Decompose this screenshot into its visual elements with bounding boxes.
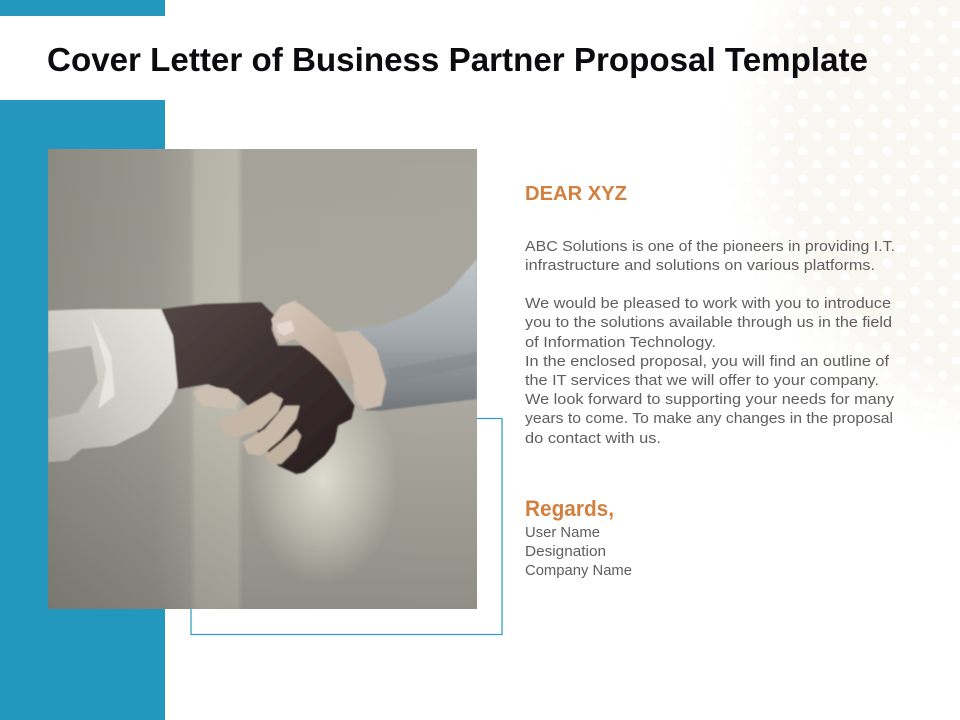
light hand fingers <box>193 386 301 464</box>
letter body text: you to the solutions available through us in the field <box>525 314 892 331</box>
letter body text: the IT services that we will offer to your company. <box>525 372 879 389</box>
letter body text: infrastructure and solutions on various platforms. <box>525 257 875 274</box>
signature block: User Name <box>525 525 600 541</box>
signature block: Designation <box>525 544 606 560</box>
left shirt sleeve <box>48 309 179 462</box>
blue top tab <box>0 0 165 16</box>
letter body text: do contact with us. <box>525 430 661 447</box>
light hand wrist and thumb <box>271 301 386 410</box>
greeting heading: DEAR XYZ <box>525 183 627 205</box>
letter body text: years to come. To make any changes in the proposal <box>525 410 893 427</box>
letter body text: ABC Solutions is one of the pioneers in providing I.T. <box>525 238 895 255</box>
halftone dot background <box>766 0 960 402</box>
letter body text: of Information Technology. <box>525 334 716 351</box>
outlined accent frame <box>191 418 502 634</box>
signature block: Company Name <box>525 563 632 579</box>
dark hand <box>161 302 355 474</box>
right sweater sleeve <box>345 259 477 411</box>
title: Cover Letter of Business Partner Proposal Template <box>47 41 868 78</box>
letter body text: We look forward to supporting your needs for many <box>525 391 895 408</box>
regards heading: Regards, <box>525 496 614 521</box>
letter body text: We would be pleased to work with you to introduce <box>525 295 891 312</box>
handshake photo <box>48 149 477 609</box>
blue side panel <box>0 100 165 720</box>
letter body text <box>525 238 895 447</box>
signature block <box>525 525 632 579</box>
letter body text: In the enclosed proposal, you will find an outline of <box>525 353 890 370</box>
